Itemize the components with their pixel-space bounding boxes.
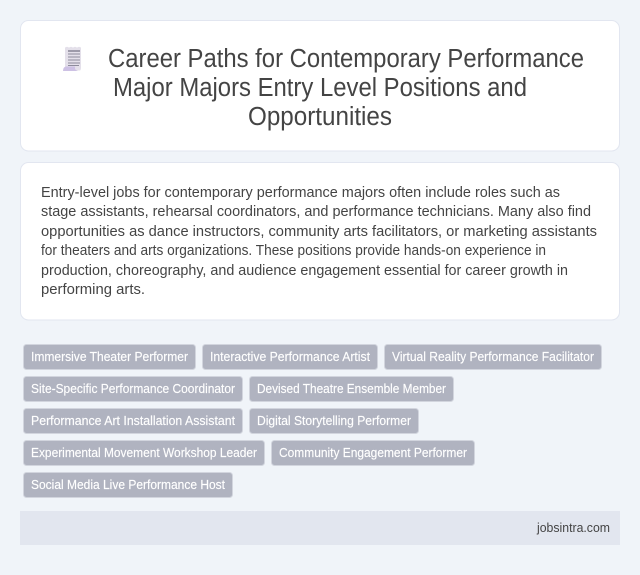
footer source text: jobsintra.com [536,520,610,535]
text block: description [41,184,597,298]
tag: Immersive Theater Performer: Immersive Theater Performer [31,349,189,364]
text block: description: for theaters and arts organizations. These positions provide hands-on experience in [41,242,546,259]
text block: description: production, choreography, and audience engagement essential for career growth in [41,262,568,279]
tag: Immersive Theater Performer [24,344,196,370]
tag: Social Media Live Performance Host: Social Media Live Performance Host [31,477,225,492]
tag: Social Media Live Performance Host [24,472,232,498]
tag: Devised Theatre Ensemble Member: Devised Theatre Ensemble Member [257,381,447,396]
tag list [24,344,602,498]
tag: Site-Specific Performance Coordinator: Site-Specific Performance Coordinator [31,381,236,396]
text block: description: Entry-level jobs for contemporary performance majors often include roles such as [41,184,560,201]
tag: Virtual Reality Performance Facilitator: Virtual Reality Performance Facilitator [392,349,595,364]
panel: header card [20,20,620,151]
text block: description: stage assistants, rehearsal coordinators, and performance technicians. Many also find [41,203,591,220]
tag: Community Engagement Performer [272,440,474,466]
tag: Digital Storytelling Performer: Digital Storytelling Performer [257,413,412,428]
tag: Devised Theatre Ensemble Member [250,376,454,402]
footer bar [20,511,620,545]
text block: description: performing arts. [41,281,145,298]
tag: Experimental Movement Workshop Leader [24,440,264,466]
title: Opportunities [248,103,392,131]
title: Major Majors Entry Level Positions and [113,74,527,102]
tag: Interactive Performance Artist [202,344,378,370]
tag: Interactive Performance Artist: Interactive Performance Artist [210,349,370,364]
tag: Virtual Reality Performance Facilitator [384,344,602,370]
text block: description: opportunities as dance instructors, community arts facilitators, or marketing assistants [41,223,597,240]
title: Career Paths for Contemporary Performance [108,45,584,73]
panel: description card [20,162,620,320]
title [108,45,584,131]
tag: Performance Art Installation Assistant: Performance Art Installation Assistant [31,413,235,428]
tag: Digital Storytelling Performer [250,408,418,434]
tag: Site-Specific Performance Coordinator [24,376,242,402]
tag: Community Engagement Performer: Community Engagement Performer [279,445,468,460]
tag: Experimental Movement Workshop Leader: Experimental Movement Workshop Leader [31,445,258,460]
tag: Performance Art Installation Assistant [24,408,242,434]
icon: document scroll [63,47,81,71]
